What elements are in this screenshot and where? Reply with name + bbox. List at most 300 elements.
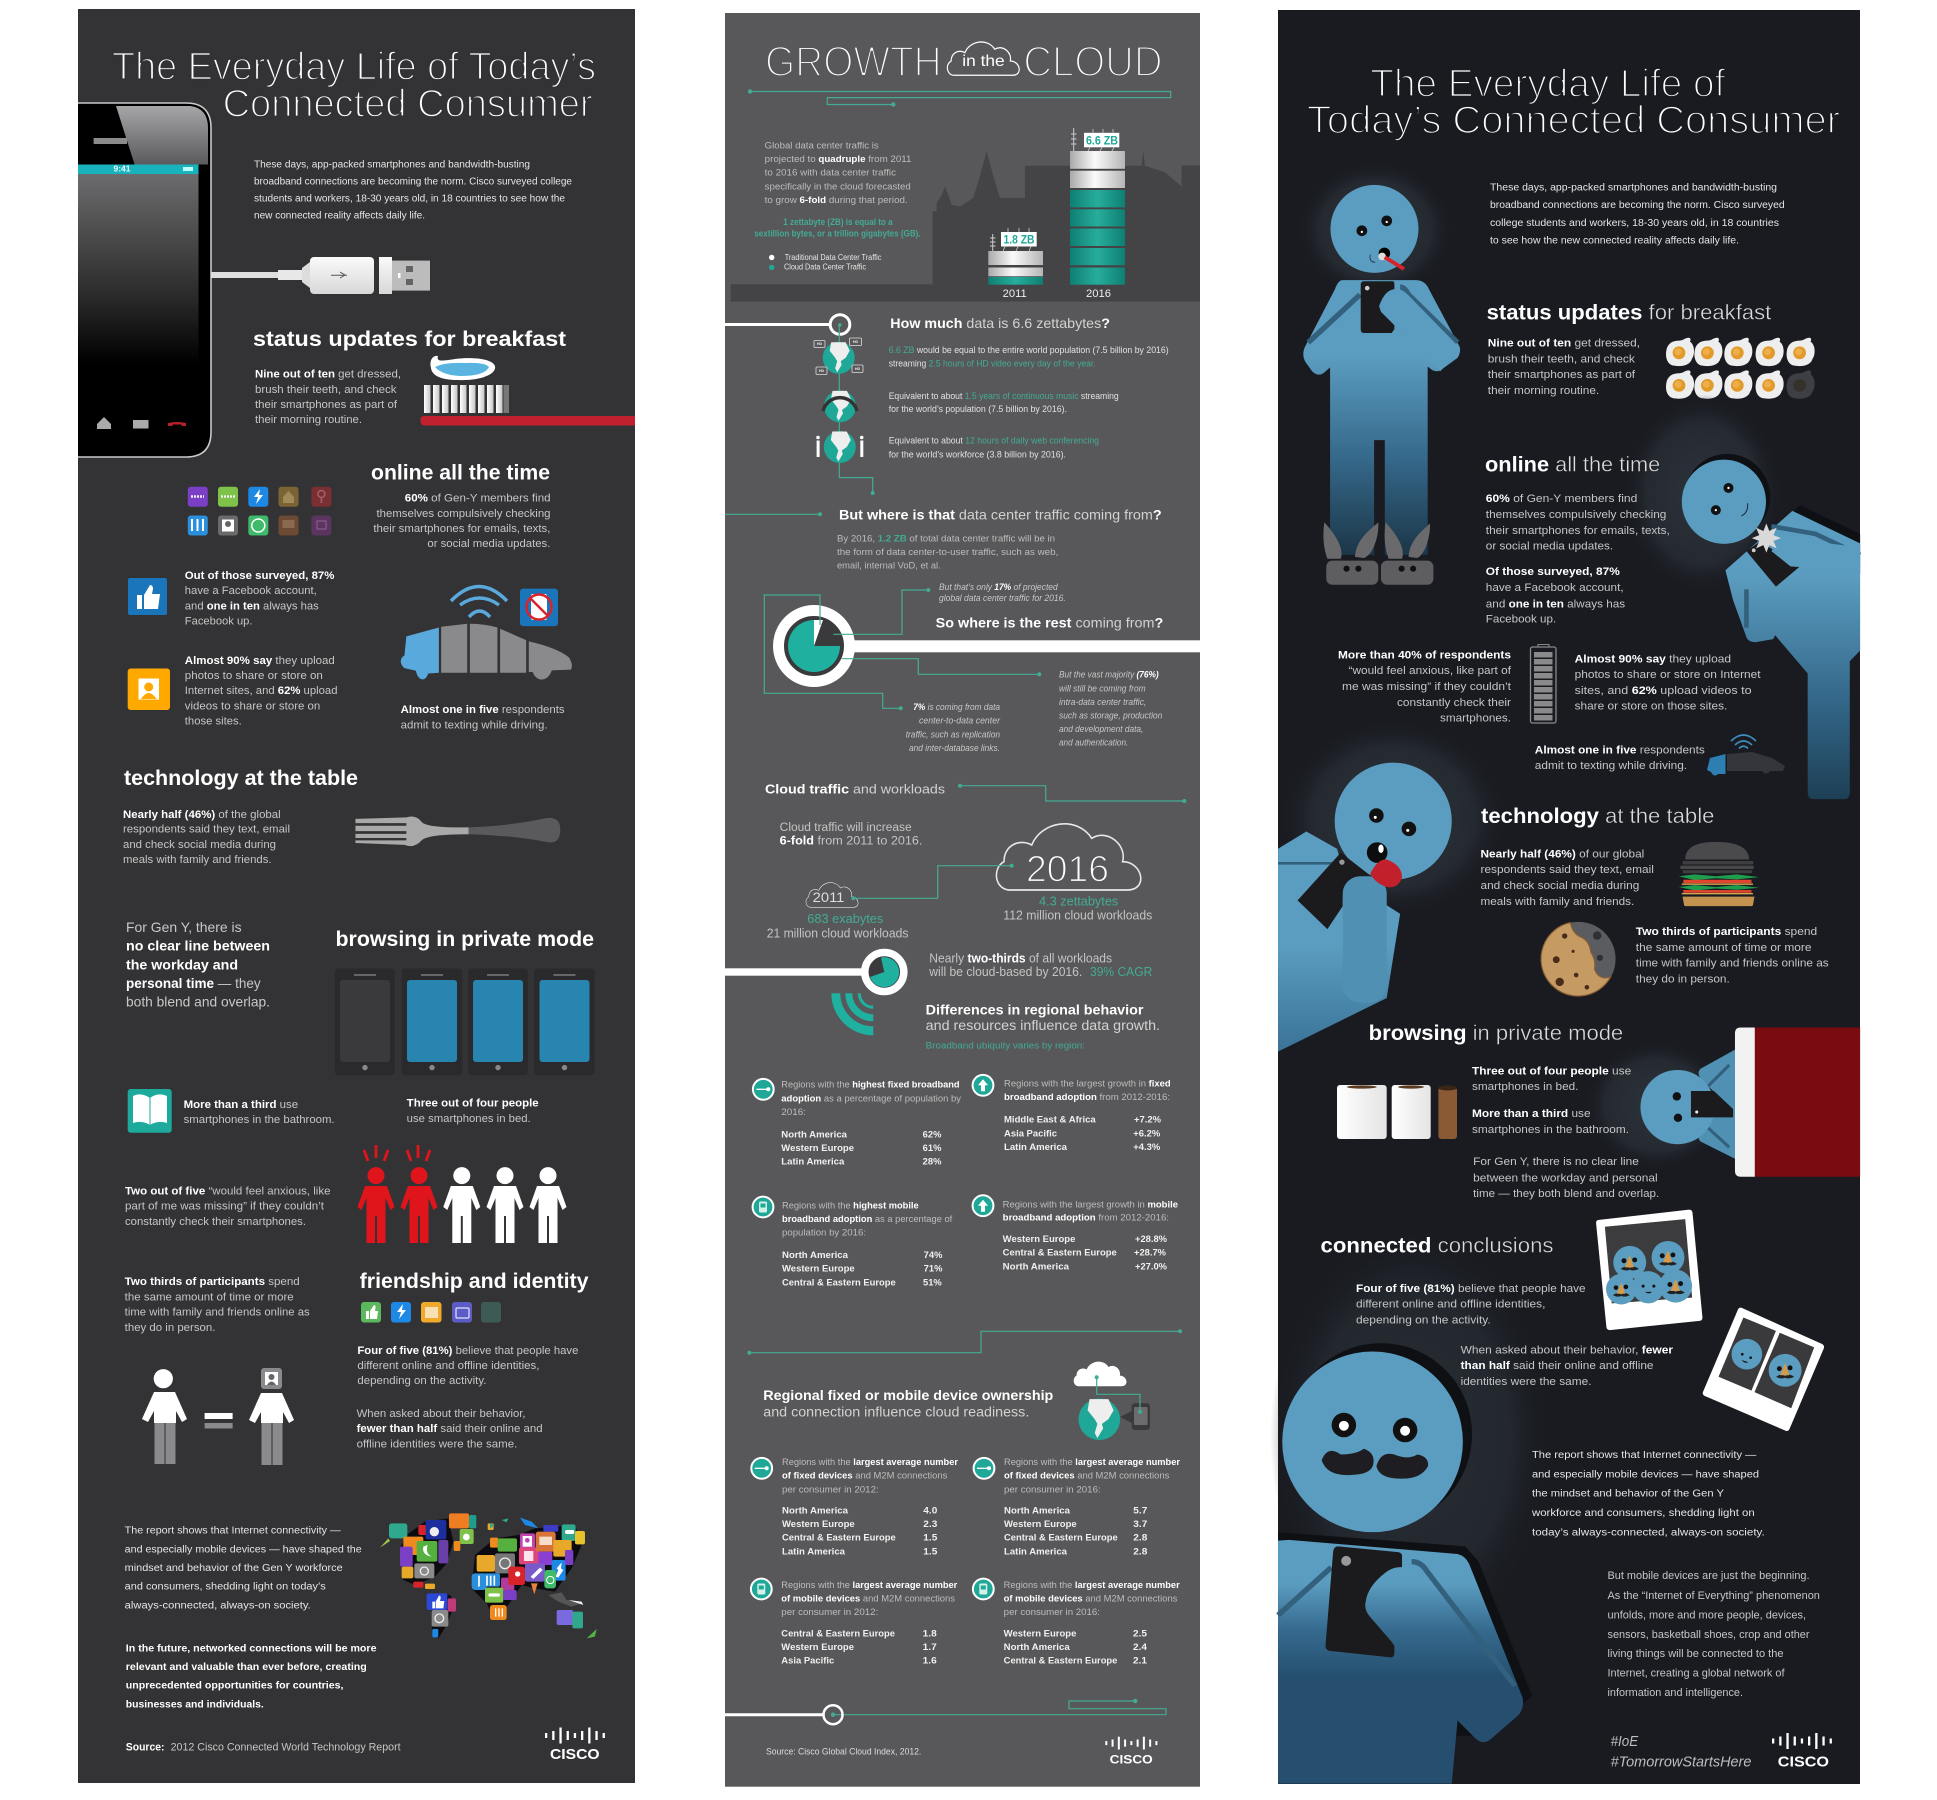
text: two thirds: they do in person.: [125, 1322, 215, 1334]
text: two thirds: [1636, 926, 1829, 986]
icon: photo tile: [128, 668, 170, 710]
table: largest growth fixed: +6.2%: [1133, 1128, 1160, 1138]
text: of those surveyed: have a Facebook account,: [1486, 582, 1624, 594]
heading: browsing in private mode: browsing in private mode: [336, 928, 594, 951]
table: highest fixed broadband: 62%: [923, 1130, 941, 1140]
text: nearly half: respondents said they text, email: [1480, 864, 1654, 876]
text: nearly half: and check social media during: [123, 839, 276, 851]
icon: group polaroid: [1596, 1210, 1702, 1330]
table: fixed devices 2016: 3.7: [1133, 1519, 1147, 1529]
text: upload: [185, 655, 338, 728]
intro text: broadband connections are becoming the norm. Cisco surveyed college: [254, 176, 572, 188]
text: seventy six percent: But the vast majority (76%): [1059, 670, 1159, 680]
icon: cookie: [1541, 922, 1616, 996]
text: upload: photos to share or store on: [185, 670, 323, 682]
icon: mobile: [753, 1197, 773, 1217]
icons: friendship row: [361, 1302, 501, 1322]
chart: five people, two alarmed: [358, 1145, 566, 1243]
text: six fold: 6-fold from 2011 to 2016.: [780, 836, 922, 848]
chart: 2011 traffic tower: [988, 228, 1043, 300]
title: Today’s Connected Consumer: [1307, 99, 1840, 142]
text: report: and especially mobile devices — have shaped the: [125, 1544, 362, 1556]
chart: two thirds pie: [865, 952, 904, 992]
table: largest growth fixed: Latin America: [1004, 1142, 1068, 1152]
text: for gen y: time — they both blend and overlap.: [1473, 1188, 1659, 1200]
text: upload: videos to share or store on: [185, 700, 320, 712]
text: more than 40 percent: me was missing” if they couldn’t: [1342, 681, 1511, 693]
text: when asked: than half said their online and offline: [1461, 1360, 1654, 1372]
text: sixty percent: or social media updates.: [1486, 541, 1613, 553]
chart: 2016 traffic tower: [1070, 128, 1125, 300]
icon: video globe: [814, 338, 863, 374]
text: global traffic intro: [765, 140, 911, 205]
text: 2011 stat: 21 million cloud workloads: [767, 927, 908, 941]
text: in the future: businesses and individuals.: [126, 1699, 264, 1710]
table: highest mobile broadband: Regions with the highest mobile: [782, 1200, 919, 1210]
text: nine out of ten: Nine out of ten get dressed,: [255, 369, 401, 381]
heading: browsing: browsing in private mode: [1369, 1022, 1623, 1045]
text: nine out of ten: brush their teeth, and check: [1488, 353, 1635, 365]
heading: regional device ownership: Regional fixed or mobile device ownership: [763, 1388, 1053, 1403]
panel: Today's Connected Consumer (navy): [1270, 10, 1860, 1784]
table: highest fixed broadband: adoption as a percentage of population by: [781, 1093, 962, 1103]
icon: conferencing globe: [816, 431, 864, 463]
text: when asked: [1461, 1344, 1674, 1388]
icon: toothbrush: [420, 356, 635, 426]
table: largest growth fixed: Regions with the largest growth in fixed: [1004, 1079, 1171, 1089]
icon: big cloud 2016: 2016: [1026, 849, 1109, 890]
text: upload: Internet sites, and 62% upload: [185, 685, 338, 697]
icons: ten fried eggs: [1666, 338, 1815, 399]
table: mobile devices 2016: 2.5: [1133, 1628, 1147, 1638]
text: sixty percent: [1485, 454, 1670, 553]
text: how much detail: for the world’s workforce (3.8 billion by 2016).: [889, 449, 1066, 459]
text: report: and especially mobile devices — have shaped: [1532, 1470, 1759, 1480]
text: internet of everything: living things will be connected to the: [1608, 1648, 1784, 1660]
text: global traffic intro: Global data center traffic is: [765, 140, 879, 150]
text: facebook: [185, 570, 335, 628]
text: hashtags: #TomorrowStartsHere: [1611, 1753, 1751, 1770]
text: bathroom: smartphones in the bathroom.: [184, 1114, 335, 1126]
text: four of five: different online and offline identities,: [357, 1360, 539, 1372]
text: sixty percent: themselves compulsively checking: [1486, 509, 1666, 521]
text: nearly half: [123, 809, 290, 866]
table: highest fixed broadband: Latin America: [781, 1157, 845, 1167]
text: nine out of ten: brush their teeth, and check: [255, 384, 397, 396]
heading: technology: technology at the table: [1481, 805, 1714, 828]
heading: connected conclusions: connected conclusions: [1320, 1234, 1554, 1257]
table: mobile devices 2012: 1.7: [923, 1642, 937, 1652]
text: in bed and bathroom: smartphones in bed.: [1472, 1081, 1578, 1093]
title: CLOUD: [1023, 38, 1163, 86]
text: how much detail: 6.6 ZB would be equal to the entire world population (7.5 billion by 2016): [889, 345, 1169, 355]
text: internet of everything: information and intelligence.: [1608, 1687, 1743, 1699]
text: zettabyte note: [754, 217, 921, 238]
table: largest growth mobile: +28.7%: [1134, 1248, 1166, 1258]
title: GROWTH: [765, 38, 942, 86]
text: sixty percent: their smartphones for emails, texts,: [1486, 525, 1670, 537]
text: nine out of ten: [1488, 338, 1640, 397]
text: how much detail: for the world’s population (7.5 billion by 2016).: [889, 404, 1067, 414]
table: fixed devices 2012: Latin America: [782, 1546, 846, 1556]
icon: smartphone: 9:41: [114, 165, 131, 174]
icon: thumbs up: [128, 578, 167, 615]
text: nine out of ten: their smartphones as part of: [255, 399, 398, 411]
table: fixed devices 2012: [751, 1457, 959, 1556]
text: upload: those sites.: [185, 716, 242, 728]
text: in bed and bathroom: Three out of four people use: [1472, 1066, 1631, 1078]
text: report: mindset and behavior of the Gen Y workforce: [125, 1563, 343, 1574]
title: [112, 46, 596, 126]
text: zettabyte note: sextillion bytes, or a trillion gigabytes (GB).: [754, 228, 921, 238]
text: source: Source: Cisco Global Cloud Index, 2012.: [766, 1746, 921, 1756]
text: report: workforce and consumers, shedding light on: [1531, 1508, 1755, 1519]
chart: 2011 traffic tower: 2011: [1003, 288, 1027, 300]
text: intro: college students and workers, 18-30 years old, in 18 countries: [1490, 218, 1779, 229]
heading: friendship and identity: friendship and identity: [360, 1270, 589, 1293]
title: [1307, 62, 1840, 142]
text: 60 percent: or social media updates.: [427, 538, 550, 550]
text: nine out of ten: [255, 369, 401, 426]
table: largest growth mobile: +28.8%: [1135, 1234, 1167, 1244]
text: more than 40 percent: More than 40% of respondents: [1338, 650, 1511, 662]
text: global traffic intro: to 2016 with data center traffic: [765, 168, 897, 178]
text: report: always-connected, always-on society.: [125, 1600, 311, 1611]
icon: video globe: HD: [855, 367, 861, 371]
intro text: students and workers, 18-30 years old, in 18 countries to see how the: [254, 193, 565, 204]
title: Connected Consumer: [223, 83, 593, 126]
table: highest mobile broadband: population by 2016:: [782, 1227, 866, 1237]
table: fixed devices 2012: 2.3: [923, 1519, 937, 1529]
text: 2016 stat: [1003, 894, 1152, 922]
text: facebook: Out of those surveyed, 87%: [185, 570, 335, 582]
text: internet of everything: Internet, creating a global network of: [1608, 1668, 1785, 1680]
text: hashtags: #IoE: [1611, 1733, 1639, 1750]
text: global traffic intro: to grow 6-fold during that period.: [765, 195, 908, 205]
table: mobile devices 2012: Regions with the largest average number: [781, 1580, 958, 1590]
heading: cloud traffic and workloads: Cloud traffic and workloads: [765, 781, 946, 796]
icon: split polaroid: [1703, 1308, 1824, 1431]
table: highest fixed broadband: [753, 1079, 962, 1167]
text: two thirds: time with family and friends online as: [125, 1307, 310, 1319]
icon: small cloud 2011: 2011: [813, 889, 845, 905]
title: The Everyday Life of: [1370, 62, 1725, 105]
table: fixed devices 2012: of fixed devices and M2M connections: [782, 1471, 948, 1481]
table: mobile devices 2016: North America: [1004, 1642, 1071, 1652]
text: by 2016: [837, 534, 1058, 571]
table: mobile devices 2016: of mobile devices and M2M connections: [1004, 1593, 1178, 1603]
text: global traffic intro: projected to quadruple from 2011: [765, 154, 911, 164]
logo: cisco: [1772, 1733, 1832, 1770]
text: facebook: Facebook up.: [185, 616, 252, 628]
connector: white line to workloads: [725, 968, 870, 976]
text: how much detail: streaming 2.5 hours of HD video every day of the year.: [889, 359, 1096, 369]
icon: battery: [1530, 644, 1556, 723]
text: facebook: have a Facebook account,: [185, 585, 317, 597]
icon: video globe: HD: [817, 342, 823, 346]
panel: Growth in the Cloud (grey): [725, 13, 1200, 1787]
text: when asked: When asked about their behavior,: [357, 1408, 526, 1420]
heading: differences in regional behavior: Broadband ubiquity varies by region:: [926, 1040, 1085, 1050]
heading: where is traffic coming from: But where is that data center traffic coming from ?: [839, 507, 1162, 523]
text: for gen y: both blend and overlap.: [126, 993, 270, 1009]
chart: 2016 traffic tower: 6.6 ZB: [1086, 135, 1118, 147]
text: nearly half: [1480, 848, 1654, 908]
connector: device section line: [747, 1329, 1182, 1355]
text: global traffic intro: specifically in the cloud forecasted: [765, 181, 911, 191]
intro text: [254, 160, 572, 222]
text: nine out of ten: Nine out of ten get dressed,: [1488, 338, 1640, 350]
text: nearly half: meals with family and friends.: [123, 854, 272, 866]
text: bathroom: [184, 1099, 335, 1126]
text: seventy six percent: [1059, 670, 1162, 748]
text: four of five: depending on the activity.: [1356, 1315, 1491, 1327]
table: fixed devices 2016: per consumer in 2016:: [1004, 1484, 1101, 1494]
table: highest mobile broadband: [753, 1197, 953, 1287]
table: mobile devices 2012: per consumer in 2012:: [781, 1607, 878, 1617]
table: largest growth fixed: Asia Pacific: [1004, 1128, 1057, 1138]
heading: how much data: How much data is 6.6 zettabytes?: [890, 315, 1110, 331]
text: nine out of ten: their smartphones as part of: [1488, 369, 1636, 381]
text: when asked: fewer than half said their online and: [357, 1423, 543, 1435]
table: fixed devices 2016: 2.8: [1133, 1546, 1147, 1556]
title: The Everyday Life of Today’s: [112, 46, 596, 89]
text: of those surveyed: and one in ten always has: [1486, 599, 1626, 611]
text: hashtags: [1611, 1733, 1751, 1770]
text: nine out of ten: their morning routine.: [1488, 385, 1599, 397]
icon: mobile: [973, 1579, 994, 1599]
table: fixed devices 2012: Regions with the largest average number: [782, 1457, 959, 1467]
text: in bed and bathroom: [1472, 1066, 1631, 1136]
table: fixed devices 2016: North America: [1004, 1505, 1071, 1515]
text: 2016 stat: 4.3 zettabytes: [1039, 894, 1119, 909]
text: almost one in five: admit to texting while driving.: [1535, 760, 1687, 772]
text: four of five: different online and offline identities,: [1356, 1298, 1545, 1310]
text: internet of everything: sensors, basketball shoes, crop and other: [1608, 1629, 1810, 1641]
logo: cisco: CISCO: [550, 1746, 600, 1763]
text: almost 90 percent: photos to share or store on Internet: [1575, 669, 1761, 681]
icon: smartphone: [78, 103, 211, 457]
text: two out of five: part of me was missing” if they couldn’t: [125, 1201, 324, 1213]
text: for gen y: the workday and: [126, 956, 238, 972]
text: report: today’s always-connected, always-on society.: [1532, 1528, 1765, 1539]
table: mobile devices 2016: per consumer in 2016:: [1004, 1607, 1100, 1617]
table: mobile devices 2016: Regions with the largest average number: [1004, 1580, 1180, 1590]
table: fixed devices 2016: Latin America: [1004, 1546, 1068, 1556]
icon: usb cable: [211, 257, 430, 294]
icon: small cloud 2011: [806, 883, 858, 907]
text: upload: Almost 90% say they upload: [185, 655, 335, 667]
text: for gen y: [126, 919, 270, 1009]
heading: differences in regional behavior: Differences in regional behavior: [926, 1002, 1144, 1017]
text: report: [1531, 1450, 1765, 1539]
text: seven percent: and inter-database links.: [909, 743, 1000, 753]
text: report: [125, 1526, 362, 1611]
text: in bed: Three out of four people: [407, 1098, 539, 1110]
text: seventy six percent: and development data,: [1059, 724, 1143, 734]
table: mobile devices 2012: Asia Pacific: [781, 1656, 834, 1666]
table: fixed devices 2012: 4.0: [923, 1505, 937, 1515]
connector: where line: [725, 512, 822, 516]
table: highest mobile broadband: 51%: [923, 1277, 942, 1287]
figure: person brushing teeth: [1297, 161, 1460, 585]
icons: app grid: [188, 487, 331, 536]
table: highest fixed broadband: 28%: [923, 1157, 941, 1167]
icon: small car: [1707, 735, 1785, 776]
text: in the future: In the future, networked connections will be more: [126, 1644, 377, 1655]
text: in bed and bathroom: More than a third use: [1472, 1108, 1591, 1120]
logo: cisco: [545, 1728, 605, 1763]
table: highest mobile broadband: North America: [782, 1250, 849, 1260]
text: six fold: [780, 822, 922, 848]
text: intro: [1490, 183, 1785, 246]
text: when asked: offline identities were the same.: [357, 1439, 517, 1451]
table: fixed devices 2016: 5.7: [1133, 1505, 1147, 1515]
text: two out of five: [125, 1185, 330, 1228]
text: for gen y: between the workday and personal: [1473, 1172, 1658, 1184]
text: two thirds: Two thirds of participants spend: [125, 1276, 300, 1288]
text: two thirds workloads: will be cloud-based by 2016.: [928, 965, 1082, 979]
text: seven percent: traffic, such as replication: [906, 729, 1000, 739]
legend: [769, 253, 881, 271]
table: mobile devices 2016: Western Europe: [1004, 1628, 1076, 1638]
text: 2011 stat: [767, 911, 908, 941]
icon: music globe: [823, 390, 857, 422]
title: in the: [962, 53, 1005, 70]
text: when asked: [357, 1408, 543, 1451]
text: for gen y: no clear line between: [126, 938, 270, 954]
text: internet of everything: unfolds, more and more people, devices,: [1608, 1609, 1806, 1621]
text: six fold: Cloud traffic will increase: [780, 822, 912, 834]
text: two thirds workloads: Nearly two-thirds of all workloads: [929, 951, 1112, 965]
text: source: Source:: [126, 1742, 164, 1754]
table: highest fixed broadband: 61%: [923, 1143, 941, 1153]
panel: The Everyday Life of Today's Connected Consumer (dark): [78, 9, 635, 1783]
text: by 2016: email, internal VoD, et al.: [837, 561, 941, 571]
icon: up arrow: [973, 1195, 993, 1216]
text: texting while driving: admit to texting while driving.: [401, 720, 548, 732]
text: in the future: [126, 1644, 377, 1710]
table: mobile devices 2012: 1.6: [923, 1656, 937, 1666]
icon: fork: [355, 816, 560, 846]
icon: video globe: HD: [819, 369, 825, 373]
connector: white bar: [840, 640, 1200, 652]
text: of those surveyed: Facebook up.: [1486, 614, 1556, 626]
text: nine out of ten: their morning routine.: [255, 414, 362, 426]
table: highest mobile broadband: Western Europe: [782, 1264, 855, 1274]
text: for gen y: [1473, 1156, 1659, 1200]
table: fixed devices 2016: Central & Eastern Europe: [1004, 1533, 1118, 1543]
text: almost one in five: Almost one in five respondents: [1535, 744, 1705, 756]
icon: connected car: [401, 586, 572, 680]
text: intro: These days, app-packed smartphones and bandwidth-busting: [1490, 183, 1777, 194]
heading: status updates: status updates for breakfast: [1487, 302, 1771, 324]
text: nearly half: meals with family and friends.: [1480, 896, 1634, 908]
table: largest growth mobile: Western Europe: [1003, 1234, 1075, 1244]
text: in the future: relevant and valuable than ever before, creating: [126, 1662, 367, 1673]
table: fixed devices 2012: Western Europe: [782, 1519, 855, 1529]
text: nearly half: Nearly half (46%) of our global: [1480, 848, 1644, 860]
logo: cisco: CISCO: [1778, 1753, 1829, 1770]
table: mobile devices 2012: Western Europe: [781, 1642, 854, 1652]
text: report: The report shows that Internet connectivity —: [125, 1526, 341, 1537]
text: texting while driving: [401, 704, 565, 732]
text: how much detail: Equivalent to about 12 hours of daily web conferencing: [889, 436, 1099, 446]
icons: four phones: [335, 968, 595, 1075]
text: two thirds workloads: 39% CAGR: [1090, 965, 1152, 979]
text: two out of five: constantly check their smartphones.: [125, 1216, 306, 1228]
table: largest growth mobile: Regions with the largest growth in mobile: [1003, 1199, 1178, 1209]
illustration: city skyline: [731, 151, 1200, 302]
table: mobile devices 2012: [751, 1579, 958, 1666]
text: facebook: and one in ten always has: [185, 601, 319, 613]
text: how much detail: Equivalent to about 1.5 years of continuous music streaming: [889, 391, 1119, 401]
chart: traffic pie: [778, 610, 850, 682]
table: fixed devices 2012: 1.5: [923, 1546, 937, 1556]
text: 60 percent: 60% of Gen-Y members find: [405, 493, 551, 505]
text: two out of five: Two out of five “would feel anxious, like: [125, 1185, 330, 1197]
text: internet of everything: But mobile devices are just the beginning.: [1608, 1570, 1810, 1582]
icon: signal arcs: [836, 993, 873, 1031]
table: mobile devices 2016: 2.4: [1133, 1642, 1147, 1652]
icon: burger: [1679, 842, 1759, 906]
table: highest fixed broadband: Regions with the highest fixed broadband: [781, 1080, 960, 1090]
text: of those surveyed: Of those surveyed, 87%: [1486, 566, 1620, 578]
text: when asked: When asked about their behavior, fewer: [1461, 1344, 1674, 1356]
text: nearly half: and check social media during: [1480, 880, 1639, 892]
icon: video globe: HD: [853, 340, 859, 344]
icon: up arrow: [973, 1075, 993, 1096]
heading: technology at the table: technology at the table: [124, 767, 358, 790]
table: largest growth mobile: +27.0%: [1135, 1261, 1167, 1271]
table: fixed devices 2012: North America: [782, 1505, 849, 1515]
connector: how much node: [725, 315, 875, 495]
table: highest mobile broadband: Central & Eastern Europe: [782, 1277, 896, 1287]
table: fixed devices 2012: Central & Eastern Europe: [782, 1533, 896, 1543]
text: 2016 stat: 112 million cloud workloads: [1003, 908, 1152, 922]
text: almost one in five: [1535, 744, 1705, 772]
text: 60 percent: [373, 493, 551, 550]
figure: person in bed: [1584, 1027, 1860, 1177]
table: fixed devices 2012: 1.5: [923, 1533, 937, 1543]
icon: fixed: [753, 1079, 774, 1100]
text: intro: broadband connections are becoming the norm. Cisco surveyed: [1490, 200, 1785, 211]
text: nearly half: Nearly half (46%) of the global: [123, 809, 281, 821]
text: two thirds: they do in person.: [1636, 974, 1730, 986]
intro text: new connected reality affects daily life.: [254, 210, 425, 222]
text: internet of everything: As the “Internet of Everything” phenomenon: [1608, 1590, 1820, 1602]
icon: cloud, globe and device: [1074, 1362, 1150, 1440]
text: how much detail: [889, 345, 1169, 459]
legend: Cloud Data Center Traffic: [784, 262, 866, 271]
table: highest fixed broadband: North America: [781, 1130, 848, 1140]
heading: regional device ownership: [763, 1388, 1053, 1420]
text: for gen y: For Gen Y, there is no clear line: [1473, 1156, 1639, 1168]
table: largest growth fixed: Middle East & Africa: [1004, 1115, 1097, 1125]
table: fixed devices 2016: 2.8: [1133, 1533, 1147, 1543]
text: almost 90 percent: [1575, 653, 1761, 712]
chart: 2016 traffic tower: 2016: [1086, 288, 1111, 300]
table: highest mobile broadband: 74%: [924, 1250, 942, 1260]
table: largest growth mobile: North America: [1003, 1261, 1070, 1271]
table: mobile devices 2012: of mobile devices and M2M connections: [781, 1593, 956, 1603]
chart: world map of app icons: [380, 1513, 597, 1638]
text: sixty percent: online all the time: [1485, 454, 1660, 476]
icon: fixed: [974, 1458, 994, 1479]
table: fixed devices 2016: Regions with the largest average number: [1004, 1457, 1181, 1467]
connector: footer line: [725, 1699, 1166, 1724]
heading: differences in regional behavior: [926, 1002, 1160, 1050]
